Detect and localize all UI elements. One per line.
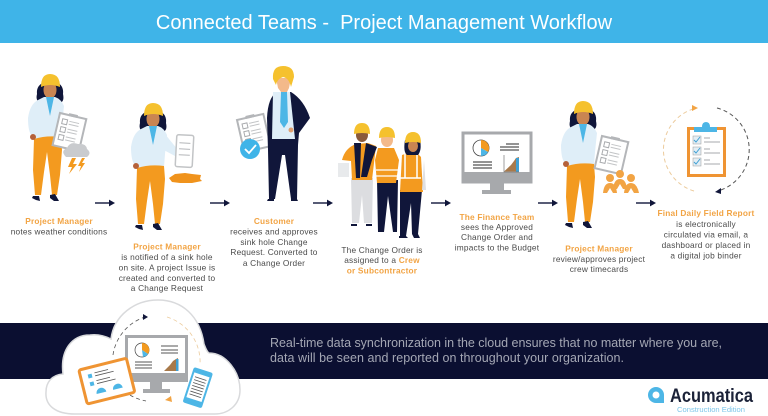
header banner [0,0,768,43]
logo: Acumatica: Acumatica [670,386,753,407]
arm [160,128,178,156]
step 7: final report clipboard with cycle [663,105,749,194]
icon: sink hole [169,173,202,183]
cloud illustration [46,300,240,414]
step 2 text: is notified of a sink hole [121,252,213,262]
arrow 2 [210,200,230,206]
logo: Acumatica: Construction Edition [677,405,745,414]
step 2 text: a Change Request [131,283,204,293]
dashed cycle [717,108,749,190]
step 3 text: Request. Converted to [230,247,318,257]
icon: logo mark [648,387,664,403]
arrow 3 [313,200,333,206]
step 1: project manager with weather [28,74,90,201]
step 5 text: sees the Approved [461,222,533,232]
step 4 text: assigned to a Crew [344,255,420,265]
step 7 text: Final Daily Field Report [657,208,755,218]
step 1 text [11,216,107,236]
step 5 text [455,212,540,252]
step 2 text: Project Manager [133,242,201,252]
icon: clipboard [237,112,271,152]
arrow 1 [95,200,115,206]
step 7 text: circulated via email, a [664,230,748,240]
worker one [338,123,377,226]
step 7 text: is electronically [676,219,736,229]
step 1 text: Project Manager [25,216,93,226]
step 7 text [657,208,755,260]
step 2 text: on site. A project Issue is [119,262,215,272]
icon: crew [603,170,639,193]
step 6 text: review/approves project [553,254,646,264]
dark band: data will be seen and reported on throughout your organization. [270,351,624,365]
step 3 text: a Change Order [243,258,305,268]
step 2 text: created and converted to [119,273,215,283]
arrow 4 [431,200,451,206]
step 5 text: The Finance Team [460,212,534,222]
title: Connected Teams - Project Management Workflow [156,12,613,34]
step 4 text: The Change Order is [341,245,423,255]
step 6 text: crew timecards [570,264,628,274]
step 3: customer in suit [237,66,310,201]
step 4 text [341,245,423,276]
step 7 text: dashboard or placed in [662,240,751,250]
step 5: finance monitor [462,133,532,194]
icon: clipboard [53,111,87,151]
arrow 6 [636,200,656,206]
step 6 text: Project Manager [565,244,633,254]
step 4: crew of three workers [338,123,426,238]
step 2 text [119,242,215,293]
icon: storm cloud [63,143,90,157]
dashed cycle [113,317,145,355]
step 6: project manager with timecards [561,101,639,228]
step 5 text: Change Order and [461,232,533,242]
worker three [399,132,426,238]
pie chart [473,140,489,156]
arrow 5 [538,200,558,206]
step 2: project manager with phone and sink hole [131,103,202,230]
band text: Real-time data synchronization in the cloud ensures that no matter where you are, [270,336,722,350]
icon: clipboard [688,122,724,176]
step 3 text: receives and approves [230,226,318,236]
bar chart [504,157,519,172]
step 5 text: impacts to the Budget [455,242,540,252]
step 3 text: Customer [254,216,295,226]
icon: approved check [240,139,260,159]
step 6 text [553,244,646,274]
icon: monitor [125,336,188,393]
logo: Acumatica [648,386,753,414]
step 3 text: sink hole Change [240,237,308,247]
step 3 text [230,216,318,268]
step 1 text: notes weather conditions [11,226,107,236]
icon: phone [175,135,194,167]
worker two [375,127,399,232]
icon: phone [183,367,213,408]
step 4 text: or Subcontractor [347,266,418,276]
icon: lightning [68,158,85,174]
step 7 text: a digital job binder [670,250,742,260]
dark band [0,323,768,379]
icon: tablet [79,358,135,404]
icon: clipboard [595,134,629,174]
